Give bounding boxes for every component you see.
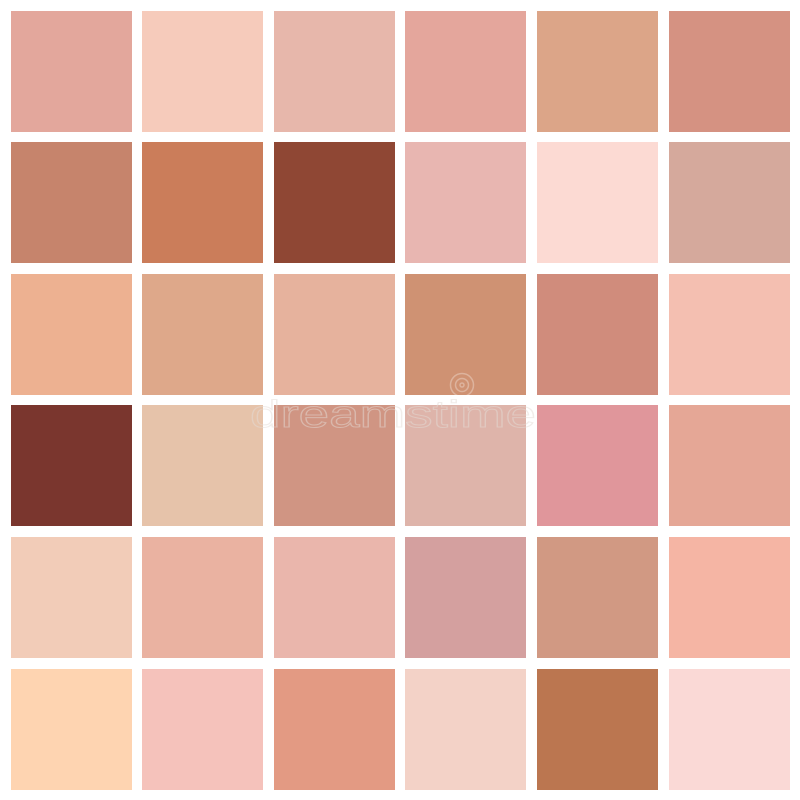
watermark spiral icon xyxy=(450,374,474,396)
swatch row 3 col 1 xyxy=(11,274,132,395)
swatch row 1 col 4 xyxy=(405,11,526,132)
swatch row 1 col 5 xyxy=(537,11,658,132)
watermark wordmark: dreamstime xyxy=(250,394,536,436)
swatch row 6 col 6 xyxy=(669,669,790,790)
swatch row 5 col 2 xyxy=(142,537,263,658)
swatch row 4 col 2 xyxy=(142,405,263,526)
swatch row 5 col 1 xyxy=(11,537,132,658)
swatch row 6 col 4 xyxy=(405,669,526,790)
swatch row 6 col 1 xyxy=(11,669,132,790)
swatch row 3 col 4 xyxy=(405,274,526,395)
swatch row 6 col 3 xyxy=(274,669,395,790)
swatch row 4 col 4 xyxy=(405,405,526,526)
swatch row 3 col 3 xyxy=(274,274,395,395)
swatch row 2 col 6 xyxy=(669,142,790,263)
swatch row 3 col 5 xyxy=(537,274,658,395)
swatch row 2 col 4 xyxy=(405,142,526,263)
swatch row 5 col 4 xyxy=(405,537,526,658)
swatch row 4 col 5 xyxy=(537,405,658,526)
swatch row 1 col 3 xyxy=(274,11,395,132)
swatch row 4 col 3 xyxy=(274,405,395,526)
swatch row 5 col 3 xyxy=(274,537,395,658)
swatch row 2 col 1 xyxy=(11,142,132,263)
swatch row 1 col 2 xyxy=(142,11,263,132)
swatch row 6 col 5 xyxy=(537,669,658,790)
swatch row 6 col 2 xyxy=(142,669,263,790)
swatch row 4 col 6 xyxy=(669,405,790,526)
swatch row 1 col 1 xyxy=(11,11,132,132)
swatch row 1 col 6 xyxy=(669,11,790,132)
swatch row 5 col 6 xyxy=(669,537,790,658)
swatch row 3 col 2 xyxy=(142,274,263,395)
swatch row 3 col 6 xyxy=(669,274,790,395)
swatch row 2 col 3 xyxy=(274,142,395,263)
swatch row 4 col 1 xyxy=(11,405,132,526)
swatch row 2 col 5 xyxy=(537,142,658,263)
swatch row 2 col 2 xyxy=(142,142,263,263)
swatch row 5 col 5 xyxy=(537,537,658,658)
